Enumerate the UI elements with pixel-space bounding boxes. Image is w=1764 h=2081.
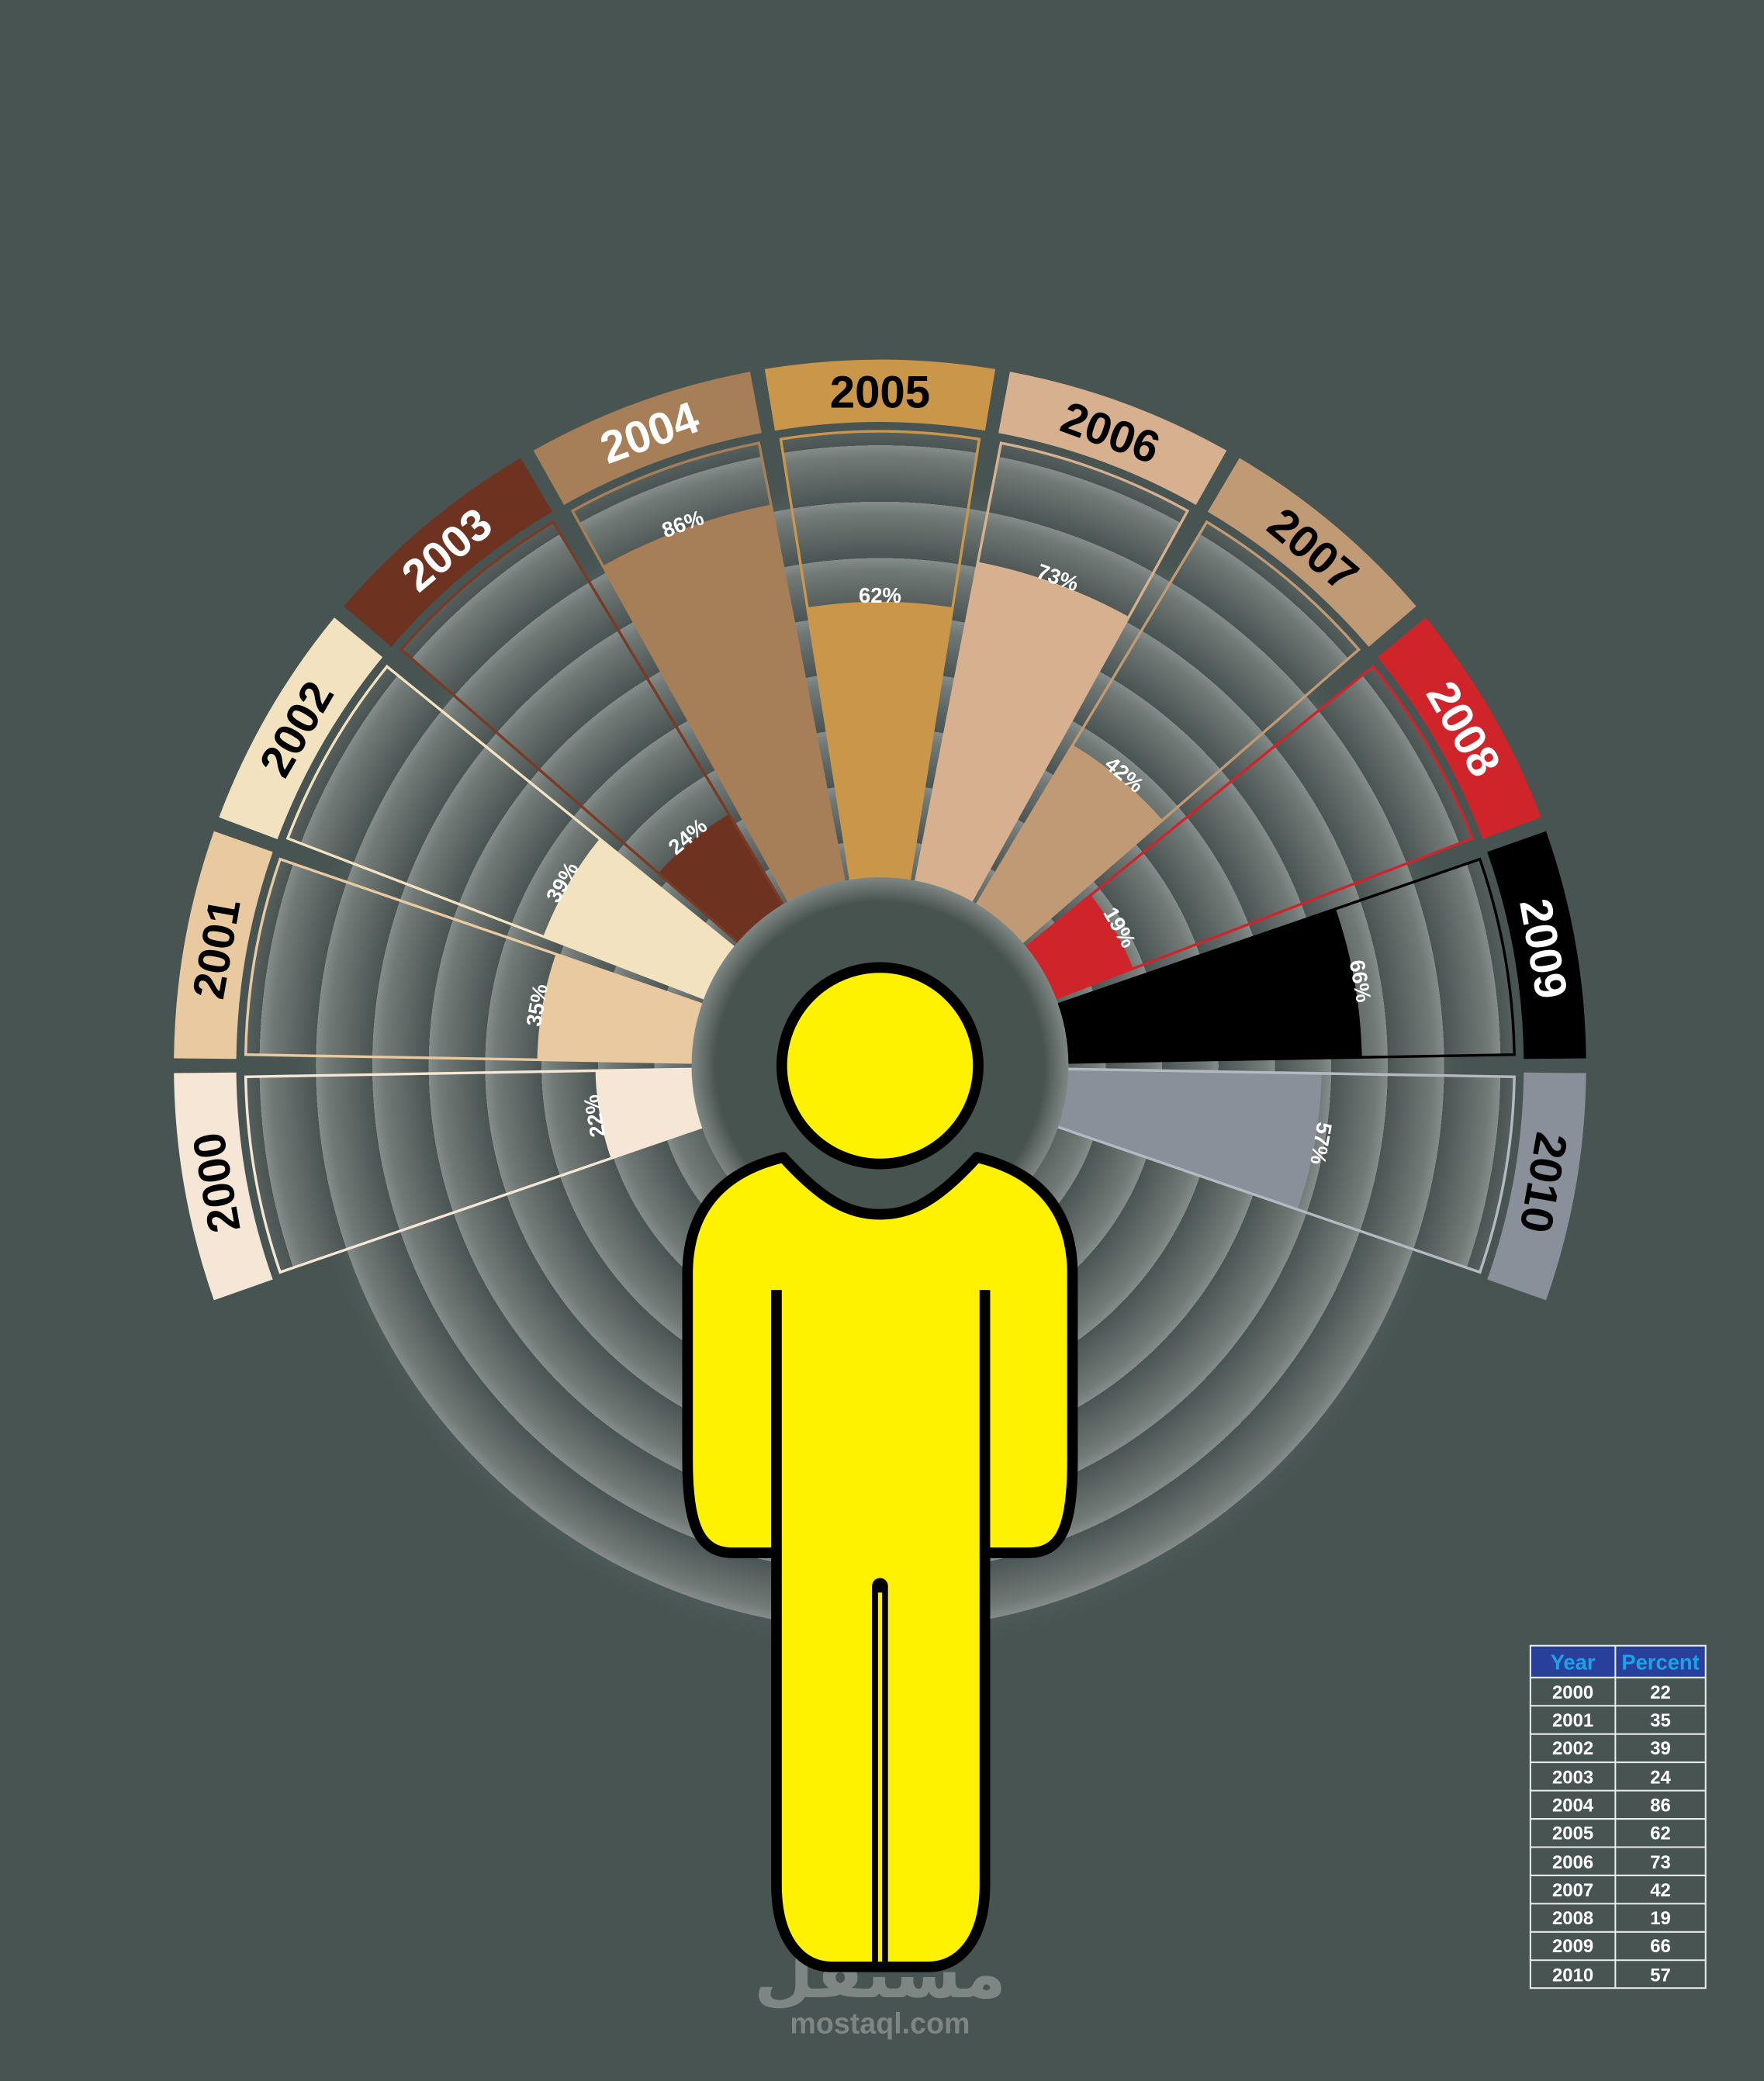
- segment: 2006 (73%): [915, 372, 1227, 901]
- segment: 2008 (19%): 2008: [1416, 673, 1510, 785]
- segment: 2005 (62%): [765, 360, 995, 882]
- segment: 2005 (62%): 62%: [859, 583, 901, 607]
- data table: 35: [1650, 1710, 1671, 1731]
- segment: 2002 (39%): 2002: [250, 673, 344, 785]
- segment: 2003 (24%): 2003: [393, 498, 502, 601]
- segment: 2004 (86%): 86%: [659, 505, 707, 542]
- data table: 73: [1650, 1852, 1671, 1873]
- segment: 2001 (35%): [174, 831, 703, 1064]
- data table: Percent: [1621, 1651, 1700, 1675]
- watermark: مستقل: [754, 1934, 1006, 2012]
- segment: 2008 (19%): 19%: [1098, 903, 1141, 952]
- segment: 2007 (42%): 42%: [1101, 752, 1149, 797]
- data table: 62: [1650, 1823, 1671, 1844]
- segment: 2004 (86%): [534, 372, 846, 901]
- segment: 2006 (73%): 2006: [1054, 392, 1166, 474]
- central hub: [691, 877, 1068, 1254]
- segment: 2009 (66%): 2009: [1510, 895, 1577, 1003]
- data table: 19: [1650, 1908, 1671, 1929]
- data table: 2010: [1552, 1965, 1593, 1986]
- segment: 2000 (22%): [174, 1067, 703, 1300]
- data table: 24: [1650, 1768, 1672, 1789]
- data table: 2001: [1552, 1710, 1593, 1731]
- segment: 2010 (57%): [1058, 1067, 1586, 1300]
- segment: 2010 (57%): 57%: [1306, 1121, 1337, 1167]
- data table: 2000: [1552, 1682, 1593, 1703]
- segment: 2006 (73%): 73%: [1034, 559, 1082, 596]
- watermark: mostaql.com: [790, 2007, 970, 2039]
- background concentric rings: [289, 475, 1471, 1656]
- data table: 2005: [1552, 1823, 1593, 1844]
- segment: 2003 (24%): 24%: [663, 814, 711, 859]
- data table: 2009: [1552, 1936, 1593, 1957]
- segment: 2001 (35%): 2001: [183, 895, 251, 1003]
- segment: 2002 (39%): [219, 617, 735, 999]
- segment: 2009 (66%): [1058, 831, 1586, 1064]
- icon: yellow person: [687, 967, 1073, 1967]
- segment: 2010 (57%): 2010: [1510, 1129, 1577, 1236]
- segment: 2003 (24%): [344, 458, 784, 943]
- data table: [1531, 1646, 1706, 1988]
- data table: 2003: [1552, 1768, 1593, 1789]
- data table: 57: [1650, 1965, 1671, 1986]
- segment: 2007 (42%): [976, 458, 1416, 943]
- segment: 2007 (42%): 2007: [1258, 498, 1368, 601]
- data table: 2006: [1552, 1852, 1593, 1873]
- data table: 66: [1650, 1936, 1671, 1957]
- data table: 42: [1650, 1880, 1671, 1901]
- data table: 2004: [1552, 1796, 1594, 1817]
- segment: 2004 (86%): 2004: [594, 392, 706, 474]
- data table: 22: [1650, 1682, 1671, 1703]
- data table: Year: [1551, 1651, 1596, 1675]
- data table: 2007: [1552, 1880, 1593, 1901]
- segment: 2009 (66%): 66%: [1345, 958, 1376, 1004]
- segment: 2000 (22%): 22%: [579, 1093, 610, 1139]
- data table: 2002: [1552, 1738, 1593, 1759]
- segment: 2000 (22%): 2000: [183, 1129, 251, 1236]
- segment: 2008 (19%): [1026, 617, 1541, 999]
- data table: 2008: [1552, 1908, 1593, 1929]
- segment: 2002 (39%): 39%: [541, 858, 583, 907]
- radial chart segments: [164, 360, 1596, 1301]
- segment: 2001 (35%): 35%: [521, 982, 552, 1028]
- segment: 2005 (62%): 2005: [830, 367, 930, 417]
- data table: 86: [1650, 1796, 1671, 1817]
- data table: 39: [1650, 1738, 1671, 1759]
